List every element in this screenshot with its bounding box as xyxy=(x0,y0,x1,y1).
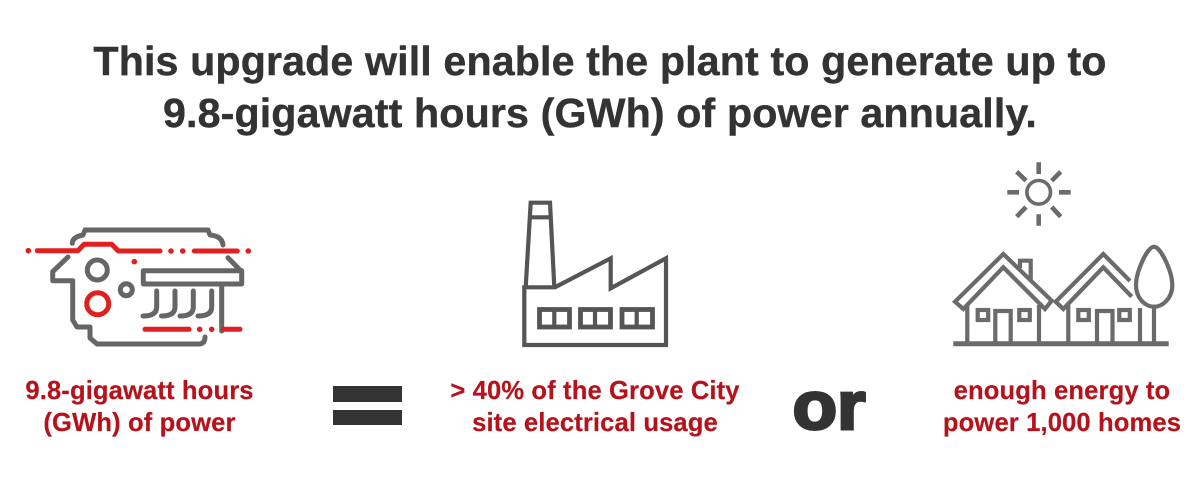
ground line xyxy=(953,341,1169,346)
title: This upgrade will enable the plant to generate up to xyxy=(93,38,1107,84)
label: site usage: site electrical usage xyxy=(472,409,718,437)
label: gigawatt hours xyxy=(25,377,254,437)
word: or: or xyxy=(793,368,865,444)
label: gigawatt hours: (GWh) of power xyxy=(43,409,236,437)
label: site usage: > 40% of the Grove City xyxy=(450,377,740,405)
label: homes: enough energy to xyxy=(954,377,1170,405)
label: site usage xyxy=(450,377,740,437)
equals sign xyxy=(333,386,402,425)
icon: house right xyxy=(1056,254,1140,343)
icon: sun xyxy=(1007,162,1071,226)
title: 9.8-gigawatt hours (GWh) of power annually. xyxy=(163,90,1037,136)
label: homes xyxy=(943,377,1181,437)
title xyxy=(93,38,1107,136)
icon: house left xyxy=(955,254,1052,343)
label: gigawatt hours: 9.8-gigawatt hours xyxy=(25,377,254,405)
label: homes: power 1,000 homes xyxy=(943,409,1181,437)
icon: tree xyxy=(1136,247,1172,343)
